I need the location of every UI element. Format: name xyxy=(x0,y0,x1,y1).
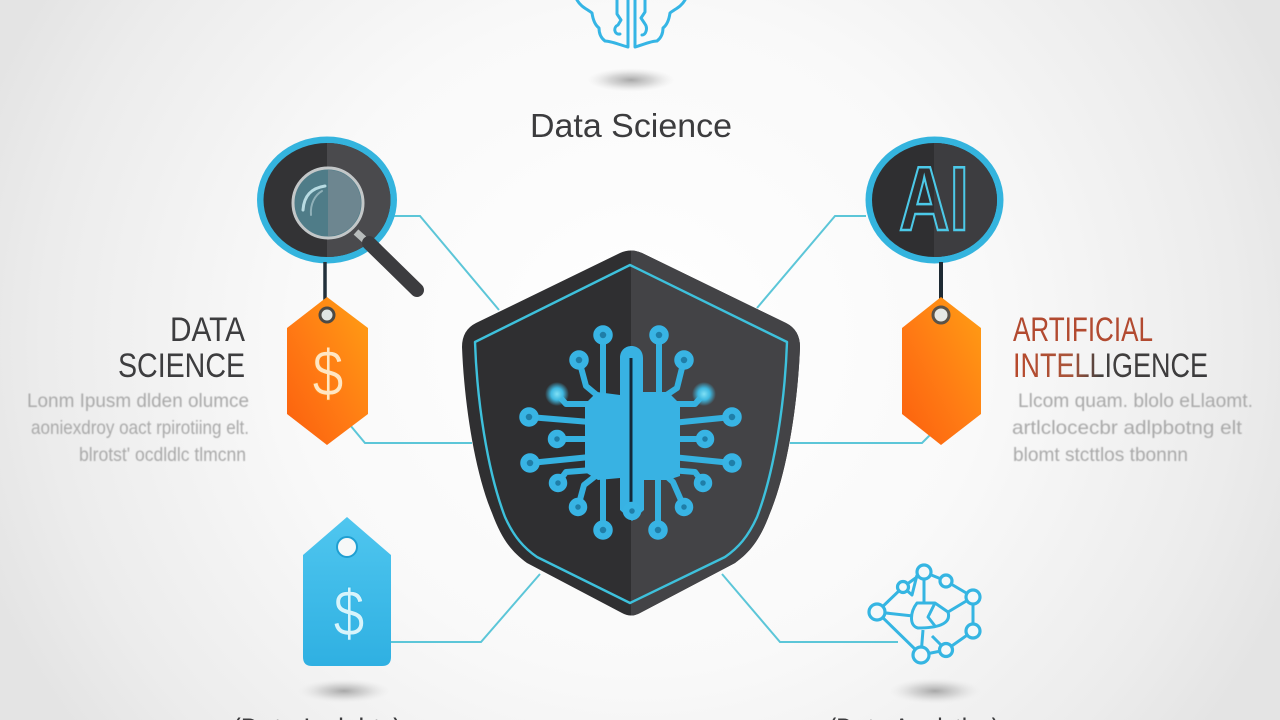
glowing node right xyxy=(692,382,716,406)
central shield xyxy=(462,250,800,616)
right circle: AI xyxy=(866,136,1004,264)
magnifier handle xyxy=(356,232,366,241)
network links xyxy=(877,572,973,655)
chip nodes xyxy=(522,328,738,536)
chip centre slit xyxy=(630,358,632,504)
circuit chip icon xyxy=(522,328,738,536)
left hanging string xyxy=(323,262,327,306)
connector lines xyxy=(350,216,932,642)
magnifier lens xyxy=(293,168,363,238)
orange price tag right xyxy=(902,297,981,445)
orange price tag left xyxy=(287,297,368,445)
tag hole xyxy=(320,308,334,322)
title: Data Science: Data Science xyxy=(530,107,732,144)
dollar sign: $ xyxy=(312,336,344,410)
top brain icon xyxy=(577,0,685,47)
circle ring xyxy=(257,136,397,264)
dollar sign: $ xyxy=(334,576,364,650)
tag body xyxy=(287,297,368,445)
shield inner outline xyxy=(475,265,787,603)
chip body xyxy=(585,346,680,521)
blue tag shadow xyxy=(298,679,390,703)
blue price tag xyxy=(303,517,391,666)
top shadow xyxy=(587,68,675,92)
heading: artificial intelligence: INTELLIGENCE xyxy=(1013,347,1208,385)
body text: data science: Lonm Ipusm dlden olumce xyxy=(27,390,249,412)
body text: data science: aoniexdroy oact rpirotiing elt. xyxy=(31,417,249,439)
body text: artificial intelligence: blomt stcttlos tbonnn xyxy=(1013,444,1188,466)
left circle: magnifying glass xyxy=(257,136,417,290)
heading: data science: SCIENCE xyxy=(118,347,245,385)
network icon xyxy=(869,565,980,663)
body text: artificial intelligence xyxy=(1012,390,1253,466)
AI letters: AI xyxy=(899,149,969,250)
circle face xyxy=(264,143,390,257)
glowing node left xyxy=(545,382,569,406)
heading: data science xyxy=(118,311,245,385)
network shadow xyxy=(889,678,981,704)
body text: data science: blrotst' ocdldlc tlmcnn xyxy=(79,444,246,466)
body text: artificial intelligence: Llcom quam. blolo eLlaomt. xyxy=(1018,390,1253,412)
heading: artificial intelligence: ARTIFICIAL xyxy=(1013,311,1153,349)
circle face xyxy=(872,143,997,257)
network nodes xyxy=(869,565,980,663)
heading: artificial intelligence xyxy=(1013,311,1208,385)
tag body xyxy=(303,517,391,666)
heading: data science: DATA xyxy=(170,311,245,349)
circle ring xyxy=(866,136,1004,264)
shield body xyxy=(462,250,800,616)
chip traces xyxy=(529,335,732,530)
tag hole xyxy=(933,307,949,323)
right hanging string xyxy=(939,262,943,306)
tag hole xyxy=(337,537,357,557)
body text: data science xyxy=(27,390,249,466)
body text: artificial intelligence: artlclocecbr adlpbotng elt xyxy=(1012,417,1243,439)
tag body xyxy=(902,297,981,445)
